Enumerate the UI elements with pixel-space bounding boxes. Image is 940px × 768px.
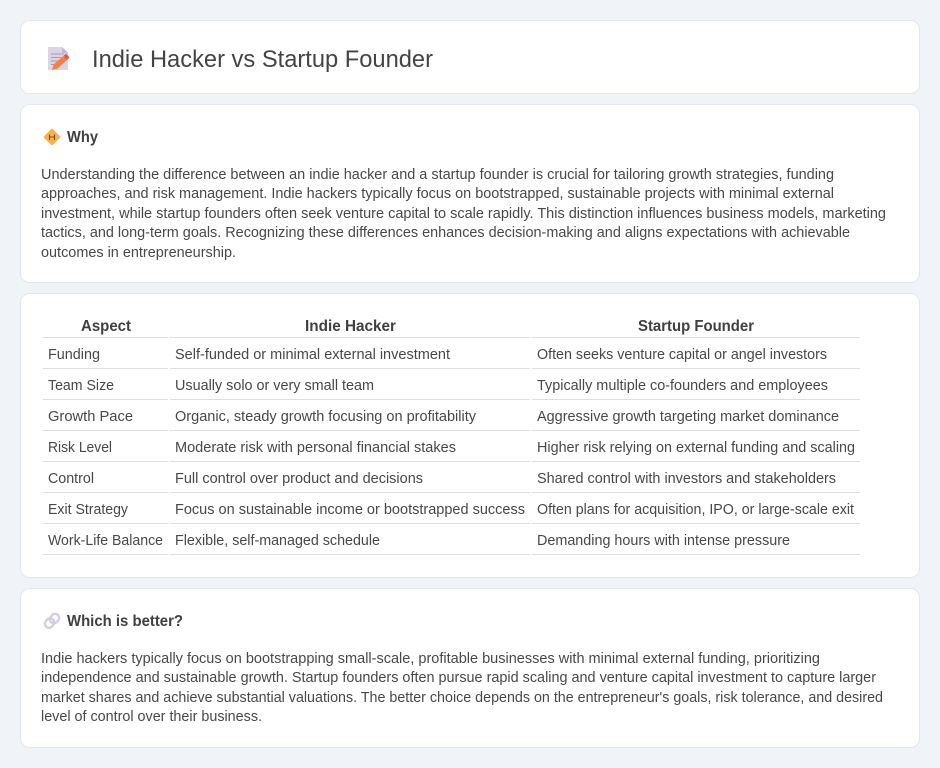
table row: growth pace bbox=[43, 409, 860, 431]
icon: document with pencil bbox=[48, 47, 70, 70]
table row: risk level: Risk Level bbox=[48, 440, 112, 456]
table row: exit strategy: Often plans for acquisition, IPO, or large-scale exit bbox=[537, 502, 854, 518]
table row: control bbox=[43, 471, 860, 493]
table row: growth pace: Aggressive growth targeting market dominance bbox=[537, 409, 839, 425]
panel: why bbox=[20, 104, 920, 282]
table row: team size: Usually solo or very small team bbox=[175, 378, 374, 394]
panel: which is better bbox=[20, 588, 920, 748]
title: Indie Hacker vs Startup Founder bbox=[92, 46, 433, 73]
table row: funding bbox=[43, 347, 860, 369]
text block: why paragraph: approaches, and risk management. Indie hackers typically focus on bootstrapped, sustainable projects with minimal external bbox=[41, 186, 834, 202]
table row: work-life balance: Work-Life Balance bbox=[48, 533, 163, 549]
table row: control: Shared control with investors and stakeholders bbox=[537, 471, 836, 487]
table row: risk level: Higher risk relying on external funding and scaling bbox=[537, 440, 855, 456]
table row: exit strategy bbox=[43, 502, 860, 524]
table row: funding: Self-funded or minimal external investment bbox=[175, 347, 450, 363]
text block: why paragraph: Understanding the difference between an indie hacker and a startup founder is crucial for tailoring growth strategies, funding bbox=[41, 167, 834, 183]
table row: team size: Team Size bbox=[48, 378, 114, 394]
table row: control: Full control over product and decisions bbox=[175, 471, 423, 487]
table row: risk level bbox=[43, 440, 860, 462]
text block: why paragraph: outcomes in entrepreneurship. bbox=[41, 245, 236, 261]
table row: risk level: Moderate risk with personal financial stakes bbox=[175, 440, 456, 456]
table row: team size bbox=[43, 378, 860, 400]
text block: which is better paragraph: Indie hackers typically focus on bootstrapping small-scale, profitable businesses with minimal external funding, prioritizing bbox=[41, 651, 820, 667]
panel: comparison table bbox=[20, 294, 920, 578]
table header row: Aspect bbox=[81, 318, 132, 335]
table row: work-life balance: Flexible, self-managed schedule bbox=[175, 533, 380, 549]
text block: which is better paragraph: independence and sustainable growth. Startup founders often pursue rapid scaling and venture capital investment to capture larger bbox=[41, 670, 876, 686]
table row: exit strategy: Focus on sustainable income or bootstrapped success bbox=[175, 502, 525, 518]
table row: funding: Funding bbox=[48, 347, 100, 363]
text block: which is better paragraph bbox=[41, 651, 883, 725]
text block: why paragraph: tactics, and long-term goals. Recognizing these differences enhances decision-making and aligns expectations with achievable bbox=[41, 225, 850, 241]
icon: warning diamond bbox=[43, 128, 61, 146]
heading: why: Why bbox=[67, 129, 98, 146]
table row: control: Control bbox=[48, 471, 94, 487]
table row: growth pace: Growth Pace bbox=[48, 409, 133, 425]
panel: title header bbox=[20, 20, 920, 94]
text block: why paragraph bbox=[41, 167, 886, 261]
heading: which is better: Which is better? bbox=[67, 613, 183, 630]
table header row: Indie Hacker bbox=[305, 318, 396, 335]
table row: work-life balance bbox=[43, 533, 860, 555]
text block: which is better paragraph: level of control over their business. bbox=[41, 709, 262, 725]
table row: funding: Often seeks venture capital or angel investors bbox=[537, 347, 827, 363]
table row: growth pace: Organic, steady growth focusing on profitability bbox=[175, 409, 477, 425]
table row: exit strategy: Exit Strategy bbox=[48, 502, 129, 518]
table row: work-life balance: Demanding hours with intense pressure bbox=[537, 533, 790, 549]
text block: which is better paragraph: market shares and achieve substantial valuations. The better choice depends on the entrepreneur's goals, risk tolerance, and desired bbox=[41, 690, 883, 706]
icon: link bbox=[43, 612, 61, 629]
text block: why paragraph: investment, while startup founders often seek venture capital to scale rapidly. This distinction influences business models, marketing bbox=[41, 206, 886, 222]
table row: team size: Typically multiple co-founders and employees bbox=[537, 378, 828, 394]
table header row bbox=[43, 318, 860, 338]
table header row: Startup Founder bbox=[638, 318, 754, 335]
